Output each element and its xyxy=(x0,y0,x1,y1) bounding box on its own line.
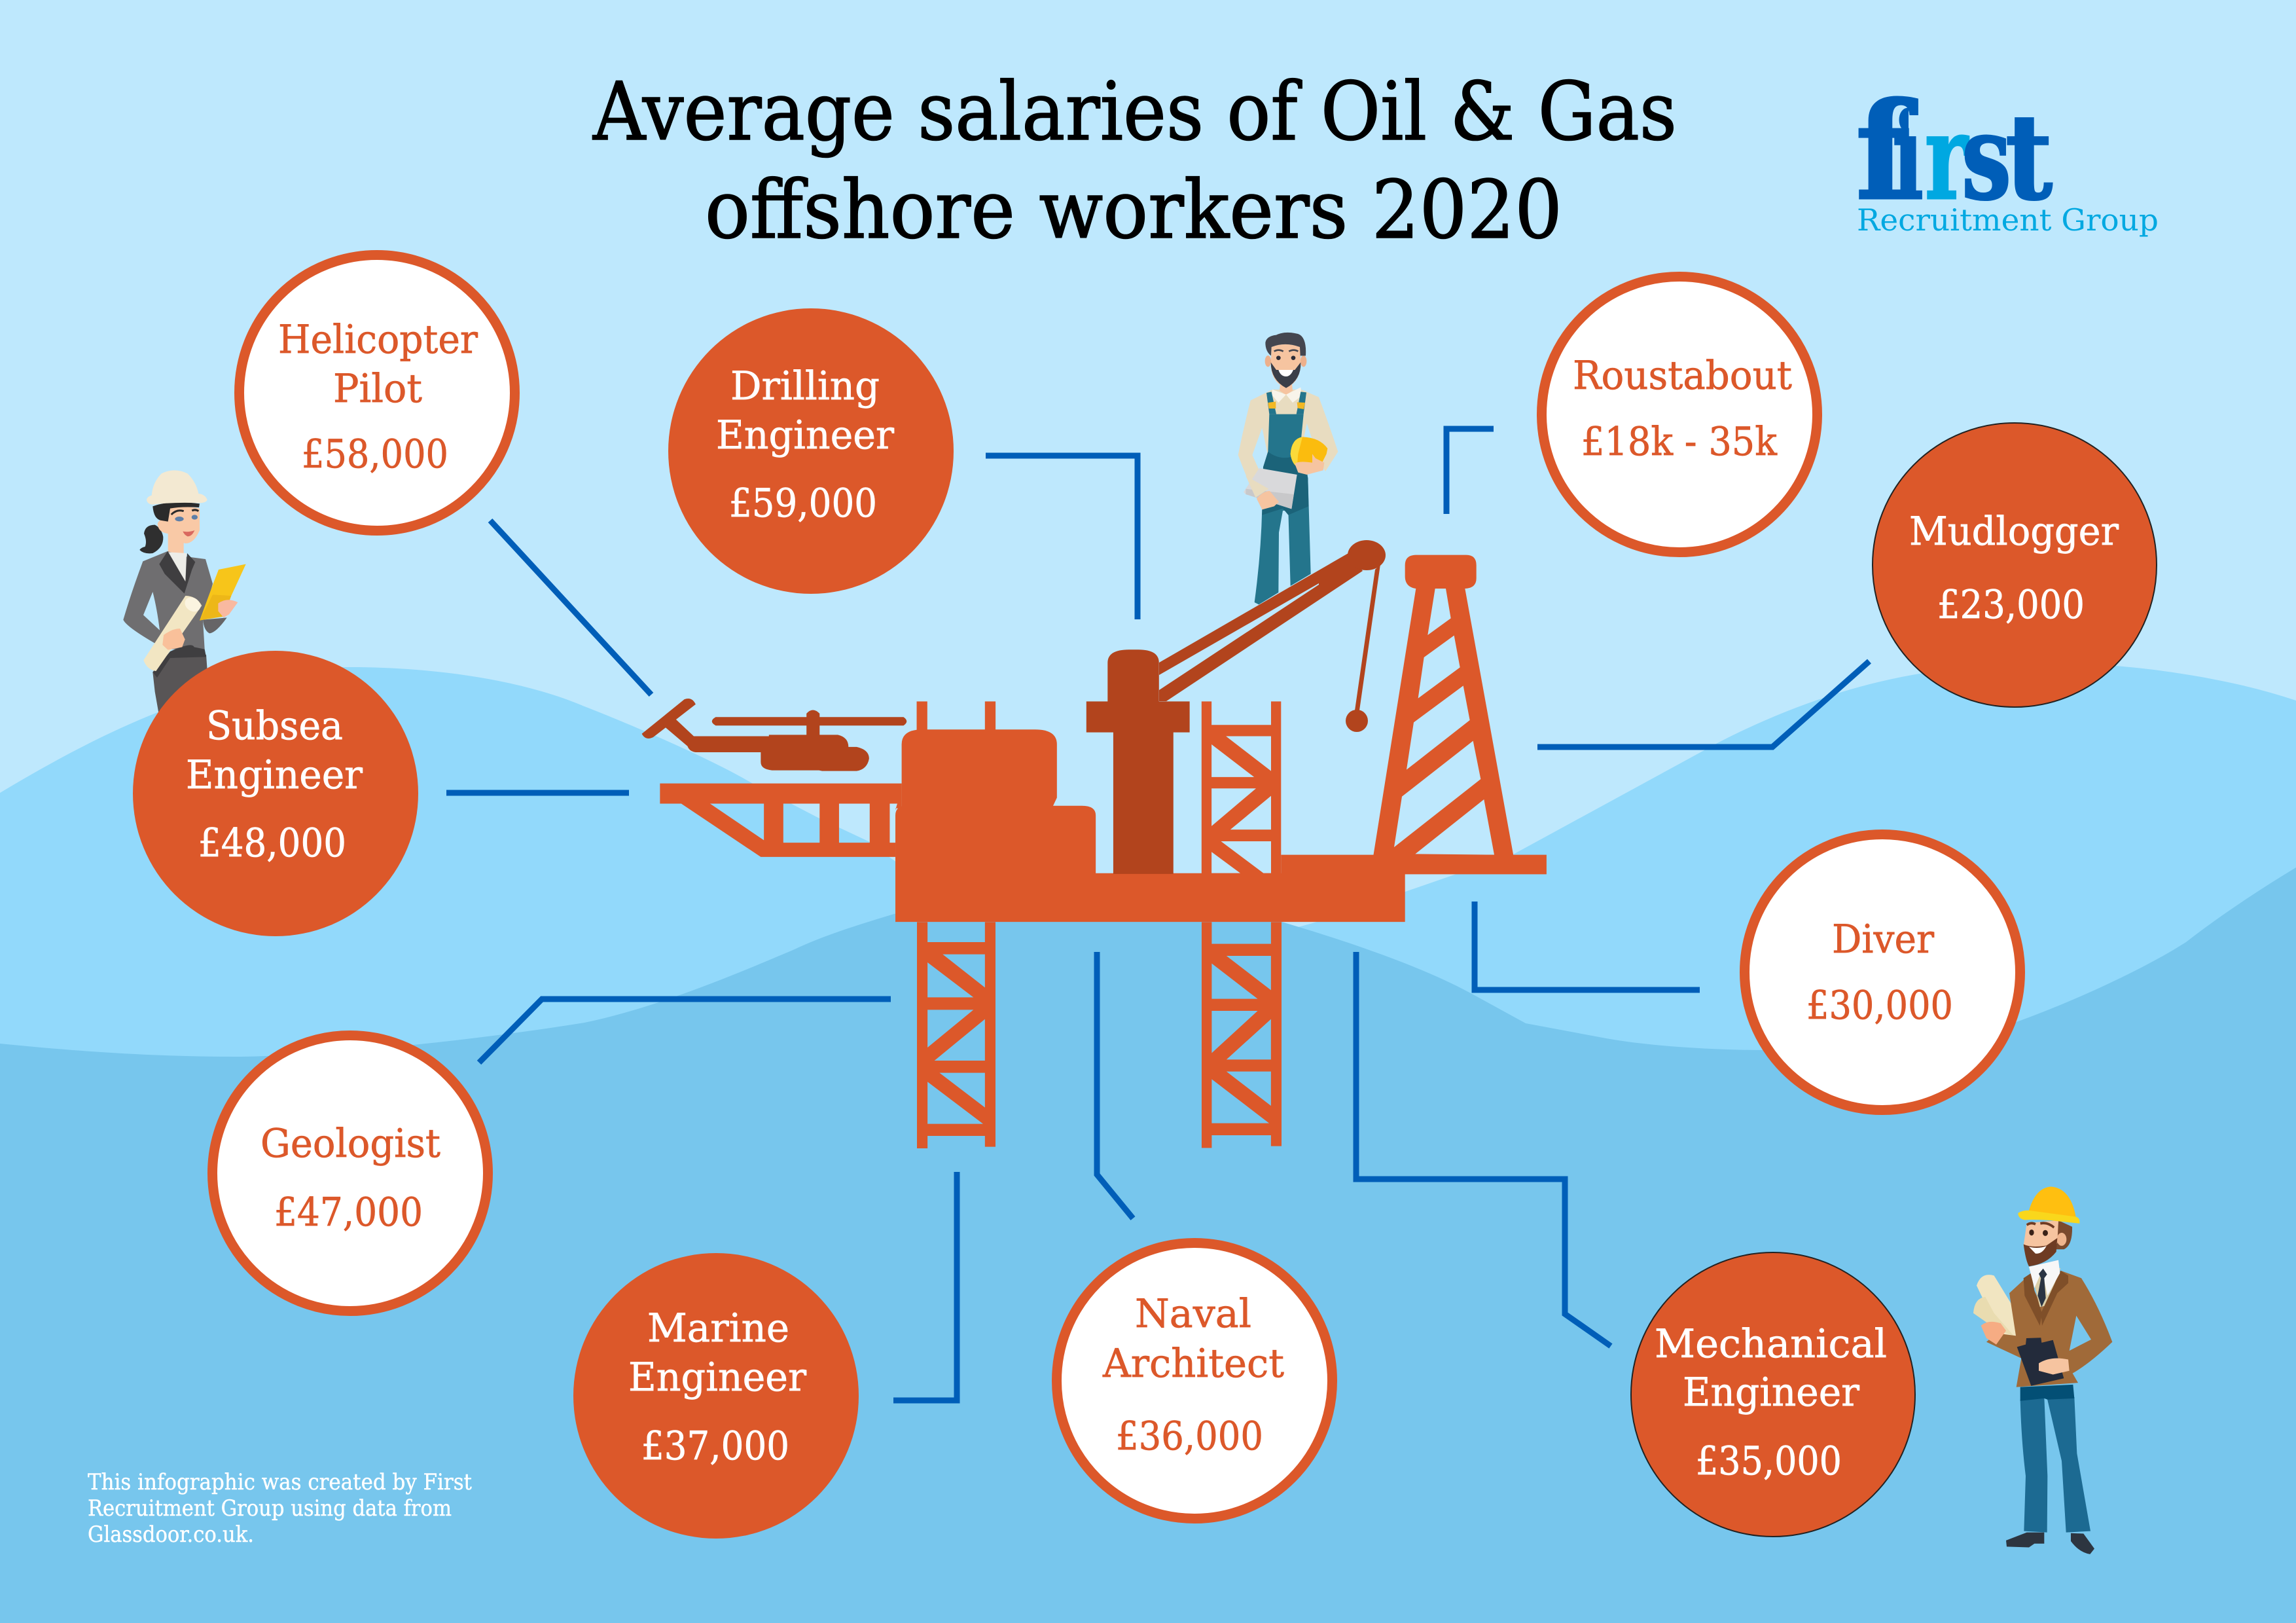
panel: Helicopter Pilot: £58,000 xyxy=(302,431,448,477)
logo: First Recruitment Group: f xyxy=(1856,73,1918,230)
line: diver xyxy=(1475,902,1700,990)
line: mechanical engineer xyxy=(1356,952,1611,1346)
panel: Roustabout: £18k - 35k xyxy=(1581,419,1778,465)
accommodation block xyxy=(902,729,1057,809)
posts on accommodation block xyxy=(917,701,996,732)
panel: Helicopter Pilot: Helicopter xyxy=(278,317,478,363)
footnote: Recruitment Group using data from xyxy=(88,1495,452,1522)
line: roustabout xyxy=(1446,429,1494,514)
figure: man in brown jacket xyxy=(1973,1187,2112,1554)
logo: First Recruitment Group: r xyxy=(1925,88,1969,227)
panel: Drilling Engineer: Engineer xyxy=(716,412,894,458)
panel: Naval Architect xyxy=(1056,1243,1333,1519)
left leg xyxy=(917,922,996,1148)
panel: Mechanical Engineer: Mechanical xyxy=(1655,1321,1887,1367)
logo: First Recruitment Group: i xyxy=(1892,88,1924,227)
footnote: This infographic was created by First xyxy=(88,1469,472,1495)
panel: Naval Architect: £36,000 xyxy=(1116,1413,1263,1459)
figure: worker in overalls xyxy=(1238,333,1338,604)
title: Average salaries of Oil & Gas xyxy=(592,65,1677,159)
title xyxy=(592,65,1677,257)
line: drilling engineer xyxy=(986,456,1138,619)
helicopter xyxy=(642,699,906,771)
panel: Roustabout: Roustabout xyxy=(1573,353,1792,399)
derrick tower xyxy=(1373,555,1513,856)
panel: Subsea Engineer xyxy=(133,651,418,936)
title: offshore workers 2020 xyxy=(705,164,1562,257)
panel: Mudlogger xyxy=(1873,423,2157,707)
line: geologist xyxy=(479,999,891,1063)
connector lines xyxy=(446,429,1869,1400)
logo: First Recruitment Group: t xyxy=(2005,88,2053,227)
panel: Geologist: Geologist xyxy=(260,1121,440,1167)
panel: Mudlogger: Mudlogger xyxy=(1909,509,2119,555)
panel: Subsea Engineer: Subsea xyxy=(206,703,343,749)
line: subsea engineer xyxy=(446,790,629,796)
helideck truss xyxy=(660,784,902,857)
panel: Mechanical Engineer: £35,000 xyxy=(1696,1438,1842,1484)
panel: Geologist xyxy=(212,1036,488,1311)
logo: First Recruitment Group: Recruitment Group xyxy=(1857,202,2159,238)
line: marine engineer xyxy=(893,1172,957,1400)
crane column xyxy=(1086,649,1190,874)
footnote: Glassdoor.co.uk. xyxy=(88,1522,254,1548)
panel: Drilling Engineer xyxy=(668,308,954,594)
deck and lower block xyxy=(895,806,1547,922)
line: helicopter pilot xyxy=(490,520,651,695)
panel: Subsea Engineer: Engineer xyxy=(186,752,363,798)
right leg xyxy=(1202,922,1282,1148)
footnote xyxy=(88,1469,472,1548)
panel: Subsea Engineer: £48,000 xyxy=(198,820,346,866)
panel: Helicopter Pilot: Pilot xyxy=(333,366,422,412)
logo: First Recruitment Group: s xyxy=(1962,88,2011,227)
panel: Mechanical Engineer xyxy=(1631,1252,1915,1537)
upper right lattice xyxy=(1202,701,1281,875)
logo: First Recruitment Group xyxy=(1856,73,2159,238)
lower support legs xyxy=(917,922,1282,1148)
panel: Roustabout xyxy=(1542,276,1817,553)
panel: Naval Architect: Naval xyxy=(1135,1291,1251,1337)
panel: Mudlogger: £23,000 xyxy=(1937,582,2085,628)
panel: Marine Engineer: Engineer xyxy=(628,1355,806,1400)
line: naval architect xyxy=(1097,952,1133,1218)
panel: Diver: Diver xyxy=(1832,917,1934,962)
crane boom xyxy=(1159,540,1386,732)
panel: Mechanical Engineer: Engineer xyxy=(1683,1370,1859,1415)
panel: Diver xyxy=(1745,834,2020,1110)
oil rig xyxy=(642,540,1547,1148)
line: mudlogger xyxy=(1537,661,1869,747)
panel: Diver: £30,000 xyxy=(1806,983,1953,1029)
background: middle wave xyxy=(0,664,2296,1623)
panel: Marine Engineer: Marine xyxy=(647,1305,789,1351)
panel: Helicopter Pilot xyxy=(240,255,514,530)
rig structure, upper xyxy=(642,649,1547,922)
panel: Marine Engineer: £37,000 xyxy=(641,1423,789,1469)
panel: Geologist: £47,000 xyxy=(274,1190,423,1235)
panel: Marine Engineer xyxy=(573,1253,859,1539)
panel: Drilling Engineer: Drilling xyxy=(730,363,880,409)
background: lower wave xyxy=(0,867,2296,1623)
panel: Drilling Engineer: £59,000 xyxy=(729,481,877,526)
panel: Naval Architect: Architect xyxy=(1102,1341,1284,1387)
figure: woman engineer xyxy=(123,470,246,729)
